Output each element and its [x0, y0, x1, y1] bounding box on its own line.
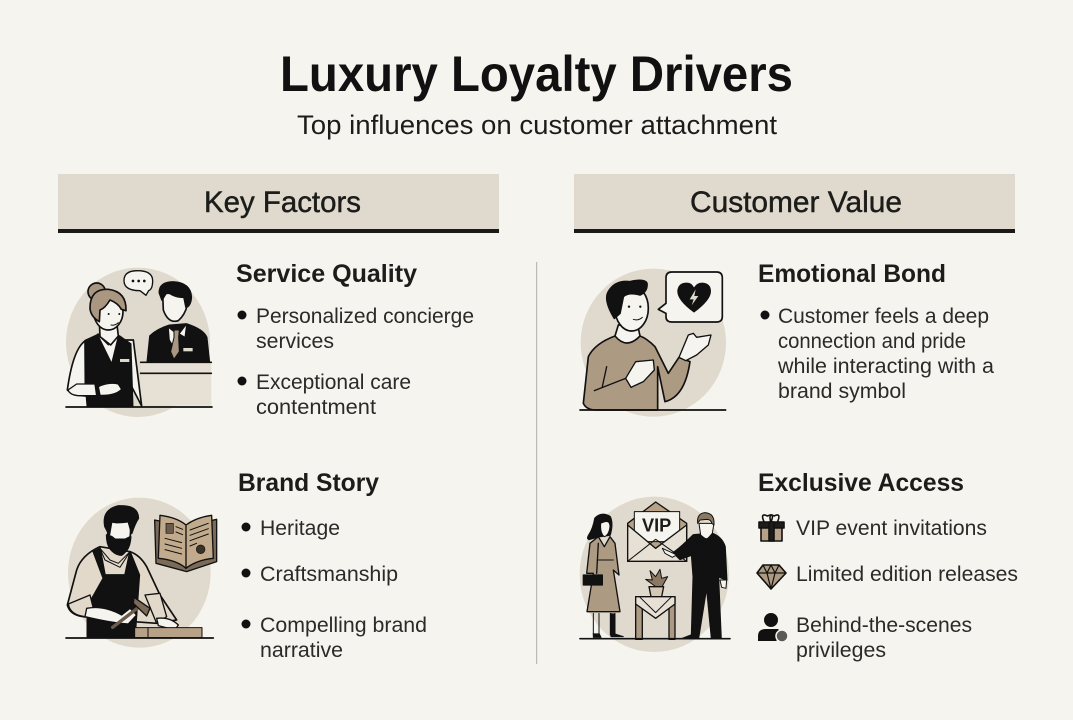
head	[615, 286, 648, 331]
panel header: Customer Value	[574, 174, 1015, 233]
head	[107, 517, 131, 555]
illustration: concierge staff	[66, 268, 212, 417]
section: Service Quality: contentment	[256, 395, 376, 419]
section: Emotional Bond: Customer feels a deep	[778, 304, 989, 328]
man	[673, 533, 727, 639]
section: Exclusive Access: VIP event invitations	[796, 516, 987, 540]
section: Brand Story	[238, 469, 427, 662]
section: Service Quality: Personalized concierge	[256, 304, 474, 328]
section: Service Quality: Exceptional care	[256, 370, 411, 394]
speech bubble with heart	[658, 272, 722, 322]
panel header: Key Factors	[58, 174, 499, 233]
section: Emotional Bond: Emotional Bond	[758, 260, 946, 288]
section: Emotional Bond: connection and pride	[778, 329, 966, 353]
illustration: craftsman and book	[66, 498, 217, 648]
hands	[626, 360, 654, 387]
subtitle: Top influences on customer attachment	[297, 110, 778, 140]
woman head	[99, 322, 118, 345]
section: Service Quality: services	[256, 329, 334, 353]
section: Service Quality	[236, 260, 474, 419]
woman	[593, 613, 623, 637]
book	[155, 519, 217, 572]
illustration: emotional bond	[580, 269, 726, 417]
table	[636, 597, 675, 639]
section: Brand Story: Craftsmanship	[260, 562, 398, 586]
title: Luxury Loyalty Drivers	[280, 46, 793, 102]
icon: gift	[759, 515, 784, 541]
illustration: VIP invitation: VIP	[642, 515, 671, 536]
blocks	[135, 628, 202, 638]
section: Exclusive Access: privileges	[796, 638, 886, 662]
section: Brand Story: narrative	[260, 638, 343, 662]
column divider	[536, 262, 537, 664]
icon: diamond	[757, 565, 786, 589]
panel header: Key Factors: Key Factors	[204, 186, 361, 219]
envelope	[628, 502, 687, 561]
section: Exclusive Access: Limited edition releases	[796, 562, 1018, 586]
torso	[583, 336, 690, 410]
section: Emotional Bond: brand symbol	[778, 379, 906, 403]
section: Emotional Bond: while interacting with a	[777, 354, 994, 378]
section: Exclusive Access: Exclusive Access	[758, 469, 964, 497]
section: Emotional Bond	[758, 260, 994, 403]
torso	[67, 547, 177, 623]
section: Brand Story: Brand Story	[238, 469, 379, 497]
desk	[141, 362, 211, 406]
woman body	[67, 340, 142, 406]
hammer	[113, 608, 137, 627]
panel header: Customer Value: Customer Value	[690, 186, 902, 219]
man	[147, 324, 209, 362]
plant	[646, 569, 668, 587]
section: Exclusive Access	[757, 469, 1018, 662]
section: Brand Story: Heritage	[260, 516, 340, 540]
icon: person with star badge	[758, 613, 788, 642]
section: Exclusive Access: Behind-the-scenes	[796, 613, 972, 637]
speech bubble	[124, 271, 153, 295]
illustration: VIP invitation	[580, 497, 730, 652]
section: Brand Story: Compelling brand	[260, 613, 427, 637]
section: Service Quality: Service Quality	[236, 260, 417, 288]
